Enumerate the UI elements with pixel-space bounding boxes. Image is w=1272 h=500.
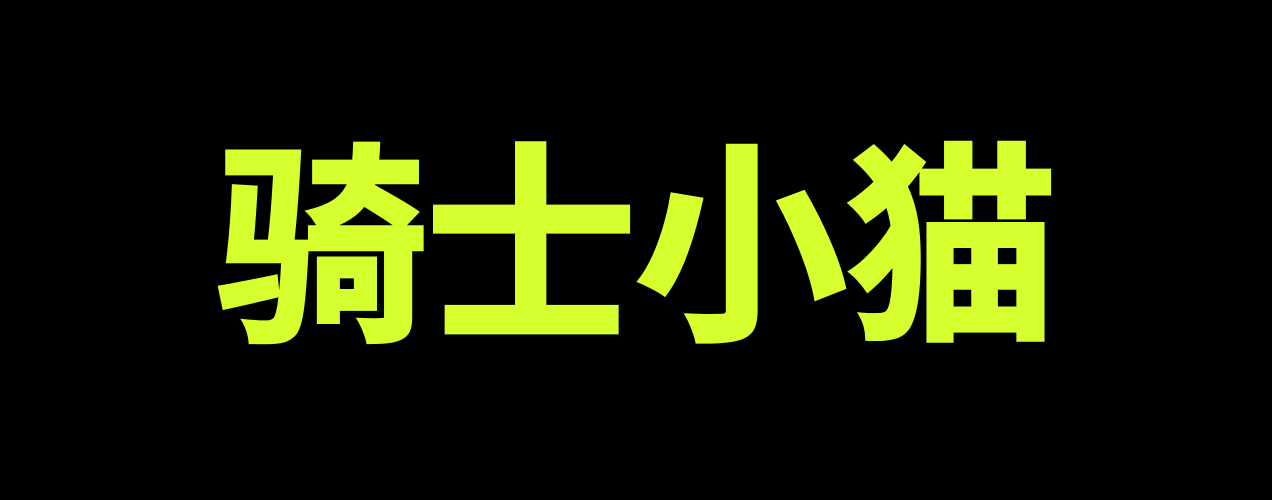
title: 士 (425, 131, 637, 368)
title: 小 (635, 131, 847, 368)
title: 骑 (216, 131, 428, 368)
title: 猫 (846, 131, 1058, 368)
